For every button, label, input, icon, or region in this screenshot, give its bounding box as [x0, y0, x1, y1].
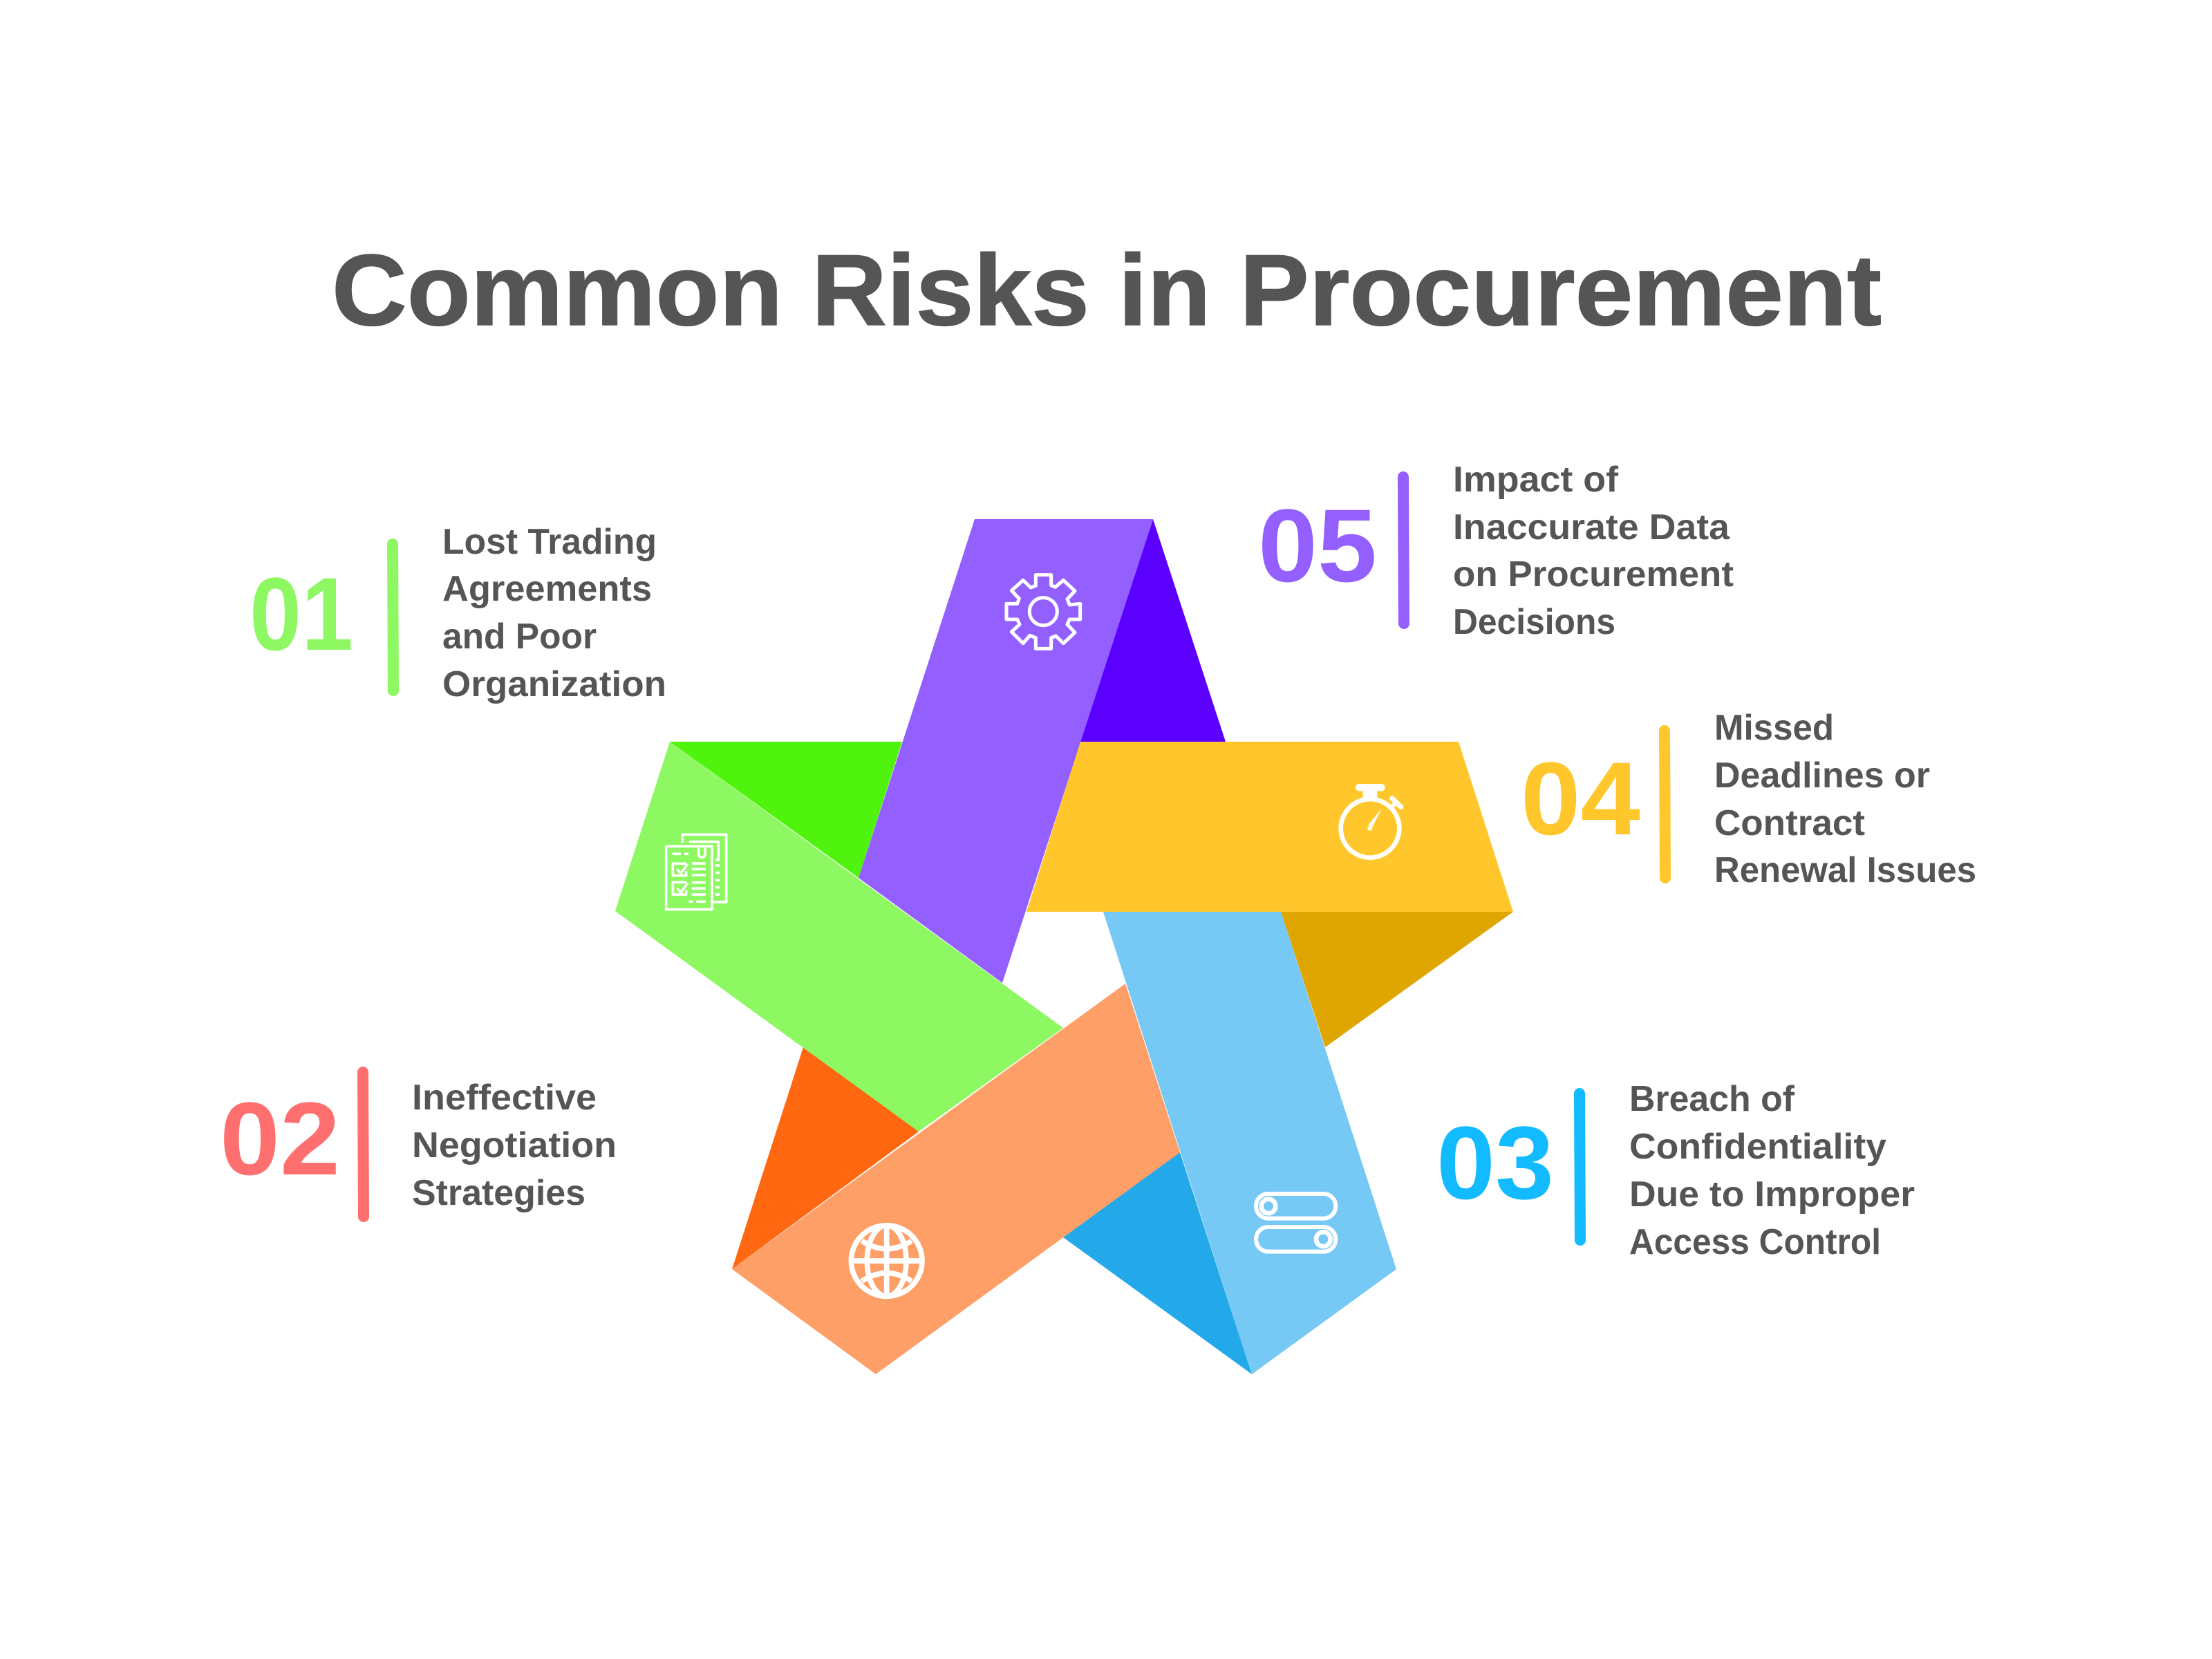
text 02: Ineffective	[412, 1078, 597, 1118]
item 04	[1521, 708, 1976, 890]
text 05: Impact of	[1453, 460, 1619, 500]
text 04: Missed	[1714, 708, 1834, 748]
fold: dark orange	[732, 1047, 919, 1269]
item 01	[250, 522, 666, 704]
text 03: Confidentiality	[1629, 1127, 1886, 1167]
title: Common Risks in Procurement	[332, 234, 1882, 346]
text 05: Inaccurate Data	[1453, 507, 1730, 547]
icon: gear	[1006, 575, 1080, 648]
text 01: Lost Trading	[442, 522, 657, 562]
text 04	[1714, 708, 1976, 890]
text 01	[442, 522, 666, 704]
text 01: Agreements	[442, 569, 652, 609]
text 02: Negotiation	[412, 1125, 617, 1165]
number 03: 03	[1436, 1105, 1554, 1221]
fold: dark green	[670, 742, 902, 878]
band: orange	[732, 984, 1180, 1374]
text 05: Decisions	[1453, 602, 1615, 642]
band: light blue	[1103, 912, 1396, 1374]
number 01: 01	[250, 556, 353, 672]
number 04: 04	[1521, 740, 1640, 856]
fold: dark purple	[1080, 519, 1226, 742]
item 05	[1258, 460, 1734, 642]
text 04: Contract	[1714, 803, 1865, 843]
text 04: Renewal Issues	[1714, 850, 1976, 890]
item 02	[220, 1072, 617, 1217]
text 03	[1629, 1079, 1915, 1262]
icon: documents checklist	[666, 834, 727, 910]
text 03: Access Control	[1629, 1222, 1881, 1262]
fold: dark blue	[1063, 1152, 1252, 1374]
number 02: 02	[220, 1080, 340, 1197]
icon: stopwatch	[1341, 784, 1401, 858]
text 03: Breach of	[1629, 1079, 1795, 1119]
number 05: 05	[1258, 487, 1377, 603]
divider 02	[363, 1072, 364, 1217]
band: purple	[859, 519, 1153, 983]
text 05	[1453, 460, 1734, 642]
fold: dark yellow	[1281, 912, 1513, 1047]
icon: toggle switches	[1256, 1194, 1335, 1252]
text 05: on Procurement	[1453, 554, 1734, 594]
text 02: Strategies	[412, 1173, 585, 1213]
text 02	[412, 1078, 617, 1213]
divider 05	[1403, 477, 1404, 624]
band: yellow	[1027, 742, 1513, 912]
icon: globe	[851, 1226, 922, 1296]
star diagram	[615, 519, 1513, 1374]
text 01: Organization	[442, 664, 666, 704]
band: green	[615, 742, 1063, 1132]
text 01: and Poor	[442, 617, 597, 657]
text 04: Deadlines or	[1714, 756, 1930, 796]
item 03	[1436, 1079, 1915, 1262]
text 03: Due to Improper	[1629, 1174, 1915, 1215]
